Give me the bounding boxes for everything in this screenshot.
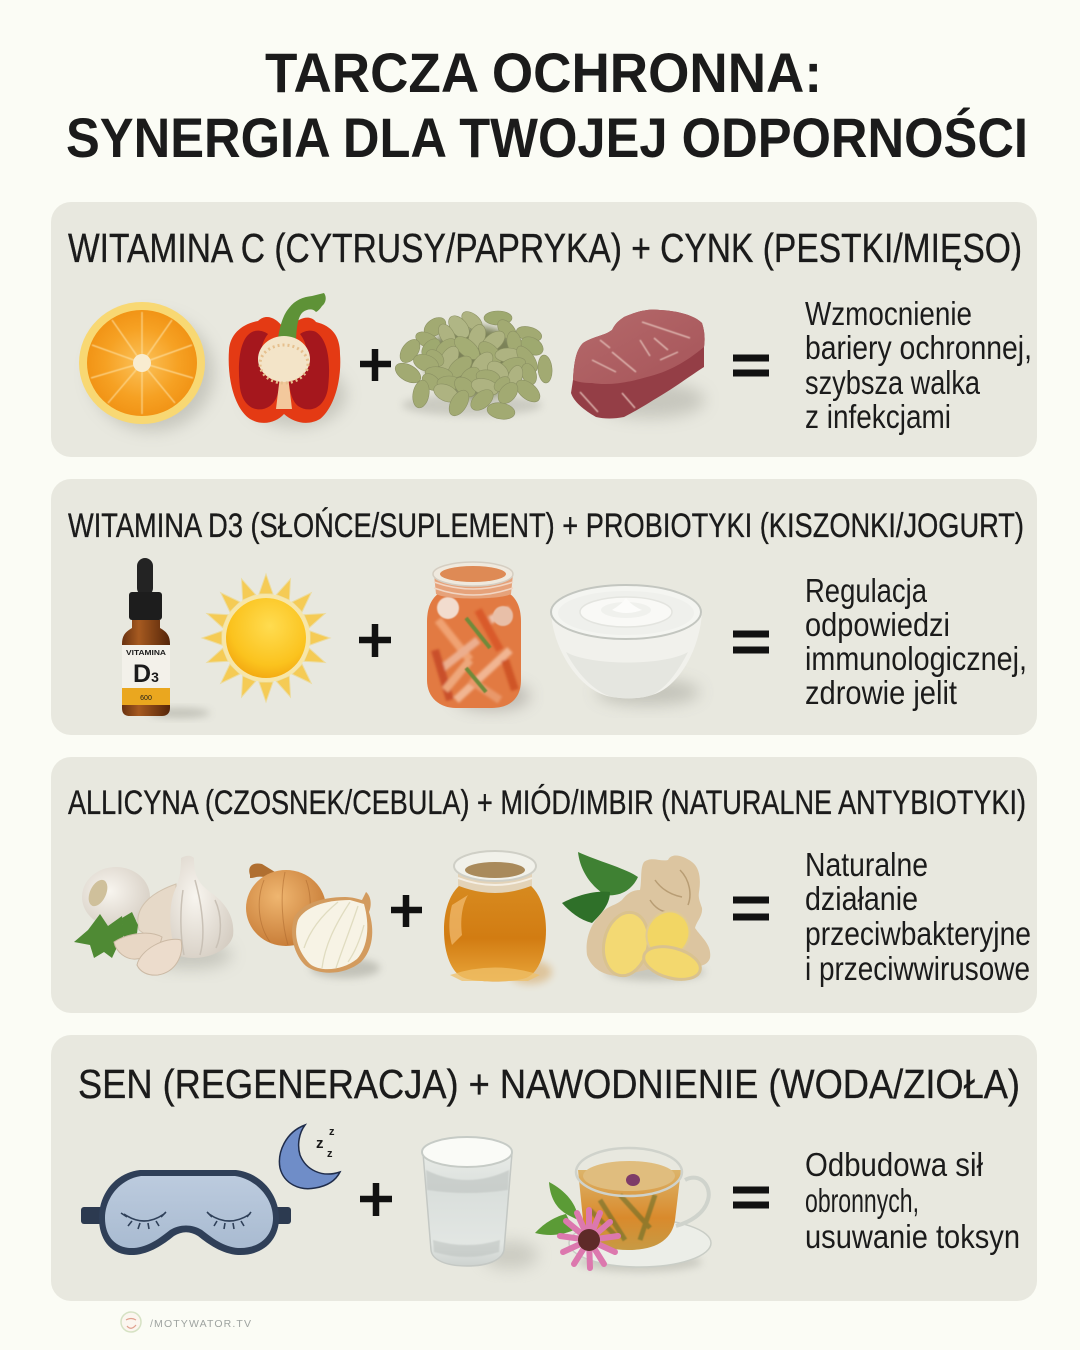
icon: vitamin D3 bottle: [122, 558, 210, 718]
result text: [805, 846, 1031, 987]
title: [66, 41, 1028, 169]
result text: przeciwbakteryjne: [805, 915, 1031, 952]
plus sign: [360, 349, 391, 381]
result text: Wzmocnienie: [805, 295, 972, 332]
icon: ginger with leaves: [562, 852, 710, 985]
result text: [805, 572, 1027, 711]
result text: obronnych,: [805, 1182, 919, 1219]
icon: garlic: [74, 856, 233, 975]
panel: sen + nawodnienie: [51, 1035, 1037, 1301]
equals sign: [733, 358, 769, 373]
icon: kimchi jar: [427, 562, 530, 710]
result text: Naturalne: [805, 846, 928, 883]
result text: Odbudowa sił: [805, 1146, 984, 1183]
result text: Regulacja: [805, 572, 928, 609]
icon: orange slice: [79, 302, 214, 431]
equals sign: [733, 634, 769, 650]
result text: usuwanie toksyn: [805, 1218, 1020, 1255]
result text: działanie: [805, 880, 918, 917]
icon: crescent moon with z letters: z: [316, 1135, 324, 1152]
icon: sleep mask: [81, 1170, 291, 1255]
icon: onions: [246, 863, 380, 978]
icon: crescent moon with z letters: z: [329, 1126, 335, 1138]
equals sign: [733, 900, 769, 917]
result text: immunologicznej,: [805, 640, 1027, 677]
icon: glass of water: [422, 1137, 538, 1269]
result text: odpowiedzi: [805, 606, 950, 643]
icon: pumpkin seeds: [392, 308, 553, 421]
title: TARCZA OCHRONNA:: [265, 41, 822, 104]
panel: witamina D3 + probiotyki: [51, 479, 1037, 735]
icon: vitamin D3 bottle: D3: [133, 660, 159, 688]
watermark: /MOTYWATOR.TV: [150, 1318, 251, 1330]
result text: [805, 295, 1032, 435]
icon: raw beef steak: [571, 310, 705, 418]
icon: herbal tea with echinacea flower: [535, 1148, 711, 1272]
icon: yogurt bowl: [551, 585, 702, 705]
result text: bariery ochronnej,: [805, 329, 1032, 366]
result text: [805, 1146, 1020, 1255]
panel: allicyna + miód/imbir: [51, 757, 1037, 1013]
watermark: [121, 1312, 251, 1332]
panel: witamina C + cynk: [51, 202, 1037, 457]
plus sign: [359, 624, 391, 657]
icon: crescent moon with z letters: z: [327, 1148, 333, 1160]
icon: honey jar: [444, 851, 552, 984]
result text: i przeciwwirusowe: [805, 950, 1030, 987]
icon: red bell pepper: [229, 293, 346, 427]
result text: zdrowie jelit: [805, 674, 957, 711]
plus sign: [391, 895, 422, 927]
icon: vitamin D3 bottle: VITAMINA: [126, 650, 166, 657]
icon: crescent moon with z letters: [279, 1125, 340, 1189]
result text: z infekcjami: [805, 398, 951, 435]
plus sign: [360, 1183, 392, 1216]
icon: sun: [202, 574, 330, 702]
icon: vitamin D3 bottle: 600: [140, 695, 152, 702]
result text: szybsza walka: [805, 364, 981, 401]
equals sign: [733, 1190, 769, 1205]
